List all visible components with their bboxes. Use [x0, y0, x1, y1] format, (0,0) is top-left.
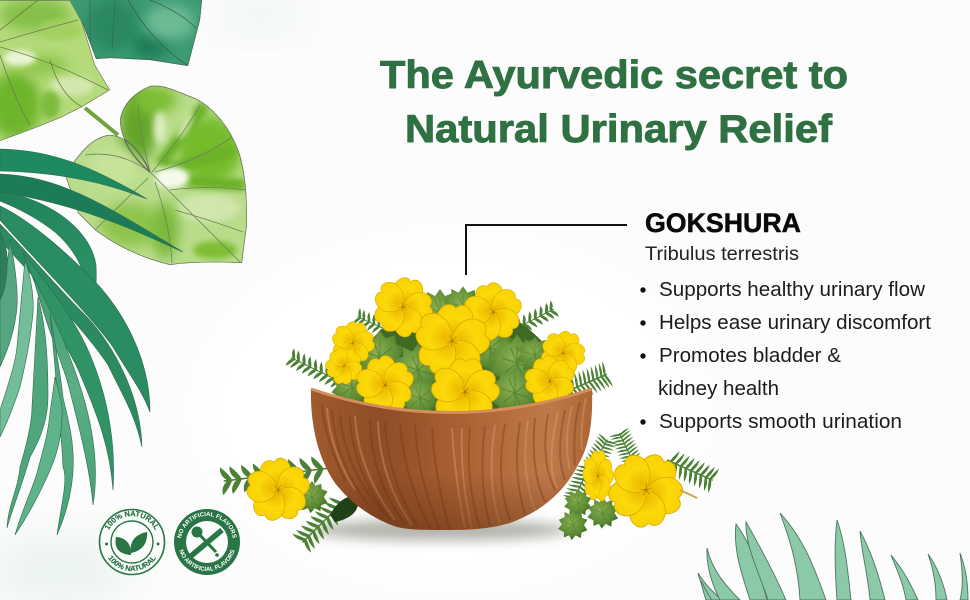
bowl with gokshura — [220, 270, 719, 553]
benefits list: kidney health — [658, 378, 779, 400]
icon: leaves — [116, 532, 147, 555]
ferns in bowl — [285, 300, 613, 403]
base fruits — [296, 481, 618, 540]
badge text — [177, 512, 237, 571]
base flowers — [239, 438, 700, 546]
ferns around base — [220, 428, 719, 553]
dark foliage behind base flower — [330, 496, 358, 522]
bowl flowers — [316, 270, 593, 429]
badge text: NO ARTIFICIAL FLAVORS — [177, 512, 237, 538]
title: Natural Urinary Relief — [405, 108, 833, 151]
leaf: top left light green — [0, 0, 115, 145]
palm frond bottom right — [698, 513, 968, 600]
title — [380, 54, 848, 151]
foliage dome — [340, 298, 575, 420]
badge text: 100% NATURAL — [105, 510, 158, 530]
badge stars — [105, 542, 160, 546]
badge text: 100% NATURAL — [108, 556, 156, 572]
badge: no artificial flavors — [174, 509, 240, 575]
ground shadow — [310, 519, 570, 541]
title: The Ayurvedic secret to — [380, 54, 848, 97]
benefits list: Promotes bladder & — [659, 345, 842, 367]
wooden bowl — [311, 388, 592, 530]
badge text: NO ARTIFICIAL FLAVORS — [179, 549, 234, 571]
leaf: top dark green — [68, 0, 204, 70]
benefits list: Helps ease urinary discomfort — [659, 312, 931, 334]
badge text — [105, 510, 158, 572]
badge: 100% natural — [98, 508, 166, 576]
palm frond left — [0, 149, 183, 535]
botanical name: Tribulus terrestris — [645, 244, 799, 265]
benefits list: Supports smooth urination — [659, 411, 902, 433]
connector line — [466, 225, 627, 275]
benefits list: Supports healthy urinary flow — [659, 279, 926, 301]
benefits list — [640, 279, 931, 433]
herb name: GOKSHURA — [645, 208, 801, 238]
leaf: round green — [66, 86, 247, 265]
bowl fruits — [331, 286, 553, 419]
icon: crossed dropper — [191, 526, 222, 557]
leaf stem — [85, 108, 118, 135]
